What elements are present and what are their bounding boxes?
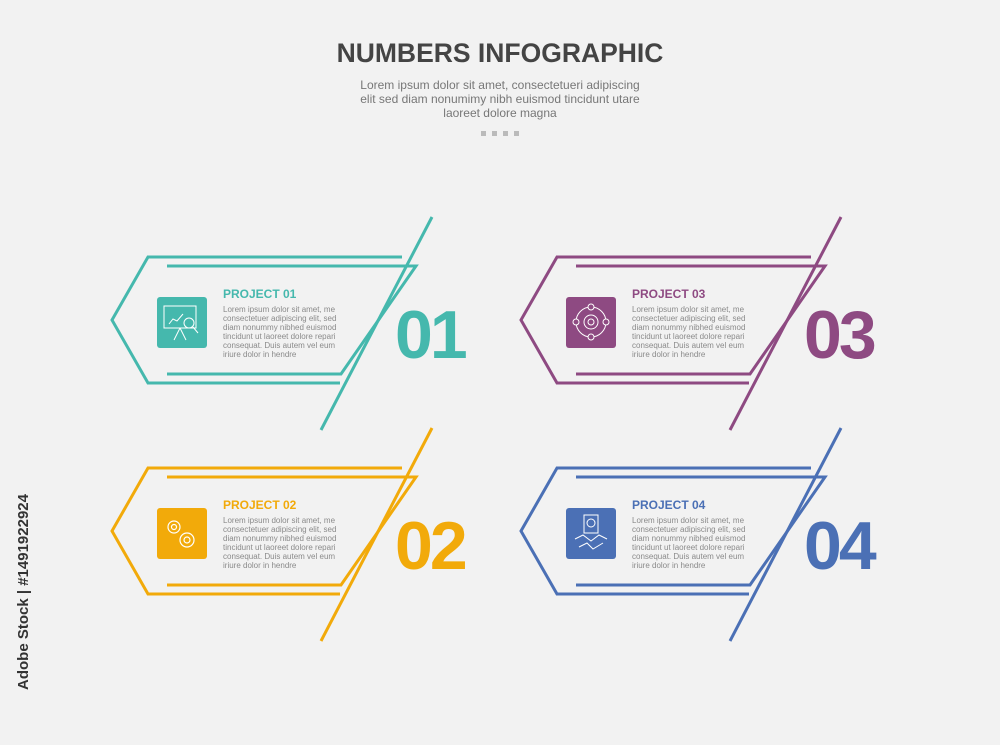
panel: project 03 (521, 217, 875, 430)
subtitle: laoreet dolore magna (443, 106, 557, 120)
subtitle: elit sed diam nonumimy nibh euismod tincidunt utare (360, 92, 640, 106)
number 01: 01 (395, 297, 466, 373)
heading: PROJECT 02 (223, 498, 297, 512)
number 02: 02 (395, 508, 466, 584)
heading: PROJECT 01 (223, 287, 297, 301)
heading: PROJECT 04 (632, 498, 706, 512)
subtitle (360, 78, 640, 120)
heading: PROJECT 03 (632, 287, 706, 301)
number 04: 04 (804, 508, 877, 584)
panel: project 02 (112, 428, 466, 641)
icon: presentation (157, 297, 207, 348)
icon: handshake money (566, 508, 616, 559)
icon: gears (157, 508, 207, 559)
number 03: 03 (804, 297, 875, 373)
title: NUMBERS INFOGRAPHIC (337, 38, 663, 68)
subtitle: Lorem ipsum dolor sit amet, consectetueri adipiscing (360, 78, 640, 92)
watermark id: Adobe Stock | #1491922924 (15, 493, 32, 690)
panel: project 04 (521, 428, 877, 641)
icon: cycle gear (566, 297, 616, 348)
panel: project 01 (112, 217, 466, 430)
dots (481, 131, 519, 136)
